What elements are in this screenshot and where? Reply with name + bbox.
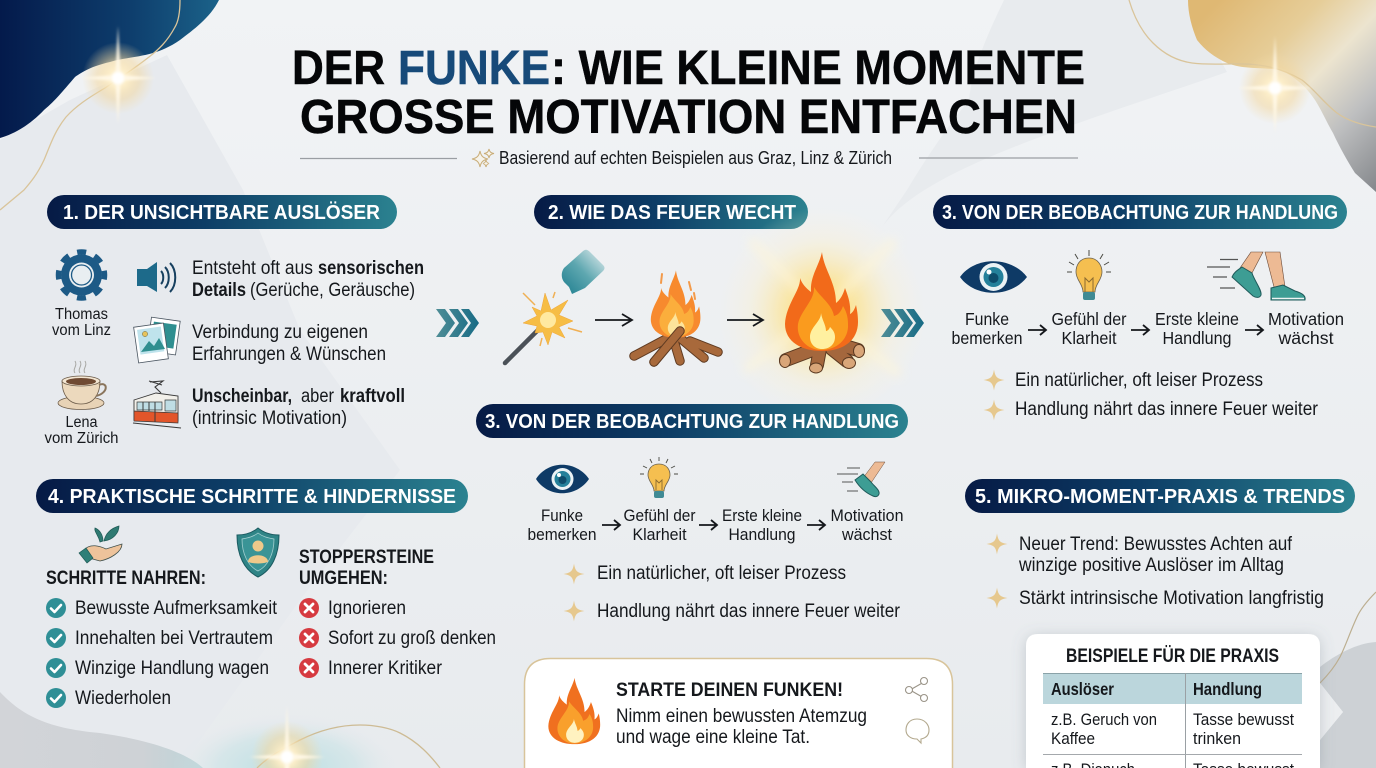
heading: stoppersteine: UMGEHEN: [299,568,388,589]
checklist: Winzige Handlung wagen [75,658,269,679]
flow labels: Handlung [728,525,796,544]
card: beispiele für die praxis: BEISPIELE FÜR DIE PRAXIS [1066,646,1279,667]
icon: coffee cup [58,361,106,410]
subtitle [300,148,1078,168]
bullet list [564,563,901,622]
icon: speaker [137,262,175,292]
caption: Lena: Lena [66,414,98,431]
icon: teal tag [562,250,604,294]
decoration: right gold line [1320,592,1376,683]
bullet list: Stärkt intrinsische Motivation langfristig [1019,588,1324,609]
icon: shield [237,528,279,577]
flow labels: wächst [841,525,892,544]
icon: glow behind big fire [717,207,927,417]
bullet list [986,534,1324,609]
caption: Lena: vom Zürich [44,430,118,447]
icon: sparkler [505,292,582,363]
icon: running foot [837,462,885,497]
icon: small campfire [634,270,718,362]
caption: Thomas: Thomas [55,306,108,323]
panel 1: der unsichtbare auslöser [44,195,424,447]
title: FUNKE [398,42,550,95]
subtitle: Basierend auf echten Beispielen aus Graz, Linz & Zürich [499,148,892,168]
obstacle list: Ignorieren [328,598,406,619]
bullet list: Neuer Trend: Bewusstes Achten auf [1019,534,1293,555]
title: GROSSE MOTIVATION ENTFACHEN [300,91,1077,144]
text: sensorische details: (Gerüche, Geräusche) [250,280,415,301]
flow labels: Klarheit [1062,328,1117,348]
flow labels: bemerken [952,328,1022,348]
icon: light bulb [640,457,678,498]
text: erfahrungen: Verbindung zu eigenen [192,322,368,343]
heading 3 middle: 3. VON DER BEOBACHTUNG ZUR HANDLUNG [485,411,899,433]
heading: stoppersteine: STOPPERSTEINE [299,547,434,568]
heading 3 middle [476,404,908,438]
icon: flame [548,678,600,744]
flow labels [952,309,1344,348]
table: Auslöser [1051,679,1114,699]
flow labels: Handlung [1162,328,1232,348]
bullet list: Handlung nährt das innere Feuer weiter [1015,399,1319,420]
flow labels: Erste kleine [1155,309,1239,329]
heading: schritte nähren: SCHRITTE NAHREN: [46,568,206,589]
flow labels [528,506,904,544]
text: unscheinbar: (intrinsic Motivation) [192,408,347,429]
bullet list: winzige positive Auslöser im Alltag [1018,555,1284,576]
heading 4: 4. PRAKTISCHE SCHRITTE & HINDERNISSE [48,486,456,508]
card: beispiele für die praxis [1026,634,1320,768]
heading 2 [534,195,808,229]
arrow: campfire to bonfire [727,314,763,326]
heading 3 [933,195,1347,229]
text: erfahrungen: Erfahrungen & Wünschen [192,344,386,365]
table: trinken [1193,729,1241,748]
decoration: gold corner blob [1129,0,1376,192]
text: sensorische details: Details [192,280,246,301]
table: z.B. Geruch von [1051,710,1157,729]
caption: Thomas [52,306,111,339]
heading 5 [965,479,1355,513]
icon: hand with sprout [79,526,122,563]
icon: gear [58,252,104,298]
panel 3 middle: von der beobachtung zur handlung [476,404,908,622]
text: erfahrungen [192,322,386,365]
heading 4 [36,479,468,513]
flow labels: Gefühl der [1052,309,1127,329]
callout text: STARTE DEINEN FUNKEN! [616,680,843,701]
decoration: bottom glow arc [249,705,440,768]
heading 2: 2. WIE DAS FEUER WECHT [548,202,796,224]
checklist: Wiederholen [75,688,171,709]
flow labels: Motivation [1268,309,1344,329]
heading: stoppersteine [299,547,434,589]
flow labels: Klarheit [632,525,687,544]
heading 1 [47,195,397,229]
callout text: Nimm einen bewussten Atemzug [616,706,867,727]
table: Tasse bewusst [1193,710,1294,729]
flow labels: Funke [541,506,583,525]
obstacle list: Innerer Kritiker [328,658,443,679]
text: unscheinbar: Unscheinbar, [192,386,292,407]
caption: Thomas: vom Linz [52,322,111,339]
panel 2: wie das feuer wächst [505,195,927,417]
bullet list: Handlung nährt das innere Feuer weiter [597,601,901,622]
flow labels: Gefühl der [624,506,696,525]
title: DER [292,42,385,95]
text: unscheinbar: aber [301,386,335,407]
text: unscheinbar: kraftvoll [340,386,405,407]
callout text [616,680,867,748]
icon: eye [536,465,589,493]
obstacle list: Sofort zu groß denken [328,628,496,649]
heading 1: 1. DER UNSICHTBARE AUSLÖSER [63,201,381,224]
text: sensorische details: sensorischen [318,258,424,279]
flow labels: Erste kleine [722,506,802,525]
bullet list [984,370,1319,420]
panel 3 right: von der beobachtung zur handlung [933,195,1347,420]
icon: speech bubble [906,719,929,743]
icon: eye [960,261,1027,293]
flow labels: bemerken [528,525,596,544]
flow labels: Motivation [830,506,904,525]
panel 5: mikro-moment-praxis [965,479,1355,768]
icon: walking feet [1207,252,1305,300]
heading 3: 3. VON DER BEOBACHTUNG ZUR HANDLUNG [942,202,1338,224]
flow labels: wächst [1277,328,1334,348]
arrow: spark to campfire [595,314,632,326]
title: : WIE KLEINE MOMENTE [551,42,1085,95]
text: sensorische details: Entsteht oft aus [192,258,313,279]
bullet list: Ein natürlicher, oft leiser Prozess [1015,370,1263,391]
flow labels: Funke [965,309,1009,329]
icon: big bonfire [780,252,864,373]
obstacle list [299,598,496,679]
decoration: navy corner blob [0,0,219,210]
checklist: Innehalten bei Vertrautem [75,628,273,649]
caption: Lena [44,414,118,447]
title [292,42,1085,144]
icon: share [906,678,928,702]
panel 4: praktische schritte [36,479,496,709]
bullet list: Ein natürlicher, oft leiser Prozess [597,563,846,584]
text: sensorische details [192,258,424,301]
table: Kaffee [1051,729,1095,748]
checklist [46,598,278,709]
arrow: chevrons right [881,309,924,337]
icon: tram [133,381,181,428]
callout text: und wage eine kleine Tat. [616,727,810,748]
icon: light bulb [1067,250,1111,300]
text: unscheinbar [192,386,405,429]
icon: photos [134,317,180,363]
checklist: Bewusste Aufmerksamkeit [75,598,278,619]
table [1043,673,1302,768]
callout: starte deinen funken [524,658,952,768]
heading 5: 5. MIKRO-MOMENT-PRAXIS & TRENDS [975,486,1345,508]
arrow: chevrons left [436,309,479,337]
table: Handlung [1193,679,1262,699]
